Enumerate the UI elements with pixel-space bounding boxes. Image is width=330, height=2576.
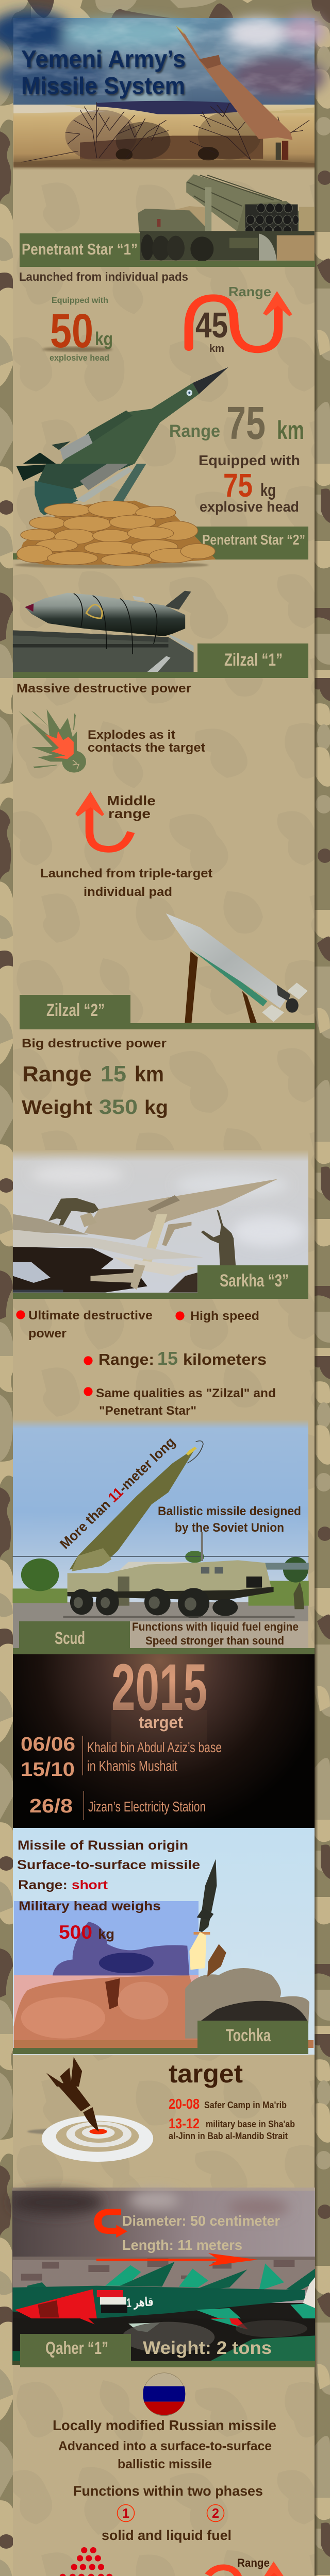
text: target list: Safer Camp in Ma'rib — [204, 2100, 287, 2110]
stat: 75 kg explosive head — [199, 452, 300, 515]
hero clouds — [0, 10, 325, 104]
text: locally modified Russian missile: Locally modified Russian missile — [53, 2417, 276, 2433]
text: diameter and length — [122, 2213, 280, 2253]
list: Sarkha qualities: "Penetrant Star" — [99, 1404, 196, 1418]
icon: phase number 1 — [118, 2505, 134, 2521]
stat: 50 kg explosive head: kg — [95, 328, 113, 349]
list: Sarkha qualities: Ultimate destructive — [28, 1309, 153, 1323]
panel: Penetrant Star 1 rocket launcher image — [138, 174, 315, 261]
icon: missile hitting target — [27, 2057, 153, 2162]
stat: 75 kg explosive head: kg — [260, 481, 276, 500]
text: ballistic missile designed by Soviet Union: by the Soviet Union — [175, 1521, 284, 1535]
text: launched from triple-target pad — [40, 867, 212, 899]
stat: range 45 km with arrow: Range — [228, 284, 271, 299]
stat: weight 350 kg: Weight — [22, 1097, 92, 1118]
text: ballistic missile designed by Soviet Union — [158, 1504, 301, 1535]
list: Sarkha qualities: High speed — [190, 1309, 259, 1323]
label: Tochka — [13, 2021, 308, 2054]
hero dark storm cloud — [13, 101, 315, 114]
target date: Jizan station: Jizan’s Electricity Station — [88, 1799, 206, 1815]
label: Scud: Scud — [55, 1629, 85, 1648]
text: Tochka description: Surface-to-surface missile — [17, 1858, 200, 1872]
label: Penetrant Star 1: Penetrant Star “1” — [22, 240, 138, 258]
list: Sarkha qualities: power — [28, 1327, 67, 1341]
text: locally modified Russian missile: ballistic missile — [118, 2457, 212, 2471]
text: target list: 13-12 — [169, 2115, 200, 2131]
text: weight 2 tons: Weight: 2 tons — [143, 2338, 272, 2358]
target dates: Khalid bin Abdul Aziz base — [21, 1734, 222, 1781]
icon: red arrow — [208, 2562, 286, 2576]
label: Penetrant Star 1 — [20, 233, 315, 267]
panel: 2015 targets — [13, 1651, 315, 1828]
image: Tochka launch — [13, 1828, 315, 2055]
title: Yemeni Army’s — [21, 45, 186, 72]
image: Qaher 1 missile — [10, 2188, 315, 2361]
text: explodes on contact: Explodes as it — [88, 728, 175, 742]
label: Zilzal 1: Zilzal “1” — [224, 650, 283, 670]
image: Zilzal 1 missile on launcher — [13, 591, 194, 672]
text: explodes on contact — [88, 728, 205, 755]
text: diameter and length: Length: 11 meters — [122, 2237, 242, 2253]
text: Tochka description: Range: — [18, 1878, 68, 1892]
text: Tochka description: Military head weighs — [19, 1899, 161, 1913]
target dates: Khalid bin Abdul Aziz base: 06/06 — [21, 1734, 75, 1755]
stat: range 75 km: Range — [169, 421, 220, 441]
label: Zilzal 2: Zilzal “2” — [46, 1001, 105, 1020]
hero truck and trees — [13, 102, 315, 167]
stat: weight 350 kg: kg — [144, 1097, 168, 1118]
stat: range 75 km — [169, 398, 304, 449]
label: Penetrant Star 2 — [13, 527, 308, 560]
target dates: Khalid bin Abdul Aziz base: 15/10 — [21, 1759, 75, 1781]
stat: 50 kg explosive head: 50 — [50, 304, 93, 358]
stat: range 45 km with arrow: 45 — [195, 305, 228, 345]
list: Sarkha qualities — [16, 1309, 276, 1418]
text: Tochka description: short — [72, 1878, 108, 1892]
text: explodes on contact: contacts the target — [88, 741, 205, 755]
callout: rotated length text: More than 11-meter long — [57, 1434, 178, 1552]
label: Qaher 1: Qaher “1” — [45, 2338, 108, 2358]
target date: Jizan station — [29, 1791, 206, 1820]
stat: 50 kg explosive head: explosive head — [50, 353, 109, 363]
text: ballistic missile designed by Soviet Union: Ballistic missile designed — [158, 1504, 301, 1518]
label: Scud — [13, 1621, 315, 1654]
text: middle range: Middle — [107, 793, 156, 808]
target dates: Khalid bin Abdul Aziz base: in Khamis Mushait — [87, 1758, 177, 1774]
image: sandbags — [15, 501, 216, 568]
icon: phase number 1: 1 — [122, 2505, 129, 2521]
stat: 75 kg explosive head: 75 — [223, 467, 253, 504]
text: diameter and length: Diameter: 50 centimeter — [122, 2213, 280, 2229]
title: Missile System — [21, 72, 185, 99]
list: Sarkha qualities: Range: — [98, 1350, 154, 1368]
target dates: Khalid bin Abdul Aziz base: Khalid bin Abdul Aziz’s base — [87, 1739, 222, 1755]
text: target list: 20-08 — [169, 2096, 200, 2112]
hero cloud texture — [13, 18, 315, 95]
stat: range 300 km with arrow: Range — [237, 2556, 270, 2569]
stat: range 15 km — [22, 1061, 164, 1087]
hero ground — [13, 105, 315, 170]
Arabic name on missile: قاهر 1 — [126, 2295, 154, 2310]
text: target list — [169, 2096, 295, 2141]
icon: phase number 2 — [207, 2505, 224, 2521]
list: Sarkha qualities: kilometers — [183, 1350, 267, 1368]
image: Zilzal 2 missile on stand — [166, 913, 308, 1023]
target date: Jizan station: 26/8 — [29, 1795, 73, 1817]
Russian flag overlay bands — [14, 1901, 199, 2048]
icon: phase number 2: 2 — [212, 2505, 219, 2521]
text: locally modified Russian missile — [53, 2417, 276, 2471]
stat: range 45 km with arrow: km — [209, 343, 224, 354]
target heading: target — [139, 1713, 183, 1732]
text: Scud engine and speed — [130, 1620, 308, 1648]
label: Sarkha 3 — [13, 1265, 308, 1299]
stat: 50 kg explosive head — [42, 296, 113, 363]
stat: 75 kg explosive head: explosive head — [200, 499, 299, 515]
arrows: diameter and length — [96, 2212, 258, 2266]
label: Tochka: Tochka — [226, 2026, 271, 2045]
text: target list: al-Jinn in Bab al-Mandib Strait — [169, 2131, 288, 2141]
text: middle range: range — [108, 806, 151, 821]
label: Zilzal 1 — [13, 643, 308, 678]
stat: weight 350 kg: 350 — [99, 1096, 138, 1118]
stat: range 75 km: km — [277, 416, 304, 445]
list: Sarkha qualities: 15 — [157, 1348, 178, 1369]
heading: massive destructive power: Massive destructive power — [16, 682, 191, 696]
icon: red winding arrow — [189, 291, 292, 349]
stat: range 300 km with arrow — [168, 2556, 286, 2576]
text: middle range — [107, 793, 156, 821]
text: launched from triple-target pad: Launched from triple-target — [40, 867, 212, 880]
text: functions within two phases: Functions within two phases — [73, 2483, 263, 2499]
text: big destructive power: Big destructive power — [22, 1037, 167, 1050]
image: Scud launcher truck — [12, 1419, 309, 1649]
text: Scud engine and speed: Speed stronger than sound — [145, 1634, 284, 1647]
text: Scud engine and speed: Functions with liquid fuel engine — [132, 1620, 299, 1633]
stat: range 45 km with arrow — [189, 284, 292, 354]
icon: middle range arrow — [75, 791, 131, 849]
hero sky — [13, 18, 315, 108]
year 2015 — [111, 1651, 207, 1743]
label: Penetrant Star 2: Penetrant Star “2” — [202, 532, 305, 548]
stat: range 75 km: 75 — [226, 398, 266, 449]
text: Tochka description: Missile of Russian origin — [18, 1838, 188, 1853]
title — [21, 45, 186, 99]
heading: target: target — [169, 2059, 243, 2088]
stat: range 15 km: km — [135, 1062, 164, 1086]
text: locally modified Russian missile: Advanced into a surface-to-surface — [58, 2439, 272, 2453]
label: Sarkha 3: Sarkha “3” — [220, 1271, 289, 1291]
text: target list: military base in Sha'ab — [206, 2119, 295, 2129]
text: Tochka description: 500 — [59, 1922, 92, 1943]
stat: 75 kg explosive head: Equipped with — [199, 452, 300, 468]
stat: range 15 km: Range — [22, 1062, 92, 1086]
icon: Russian flag circle — [143, 2372, 185, 2416]
label: Qaher 1 — [12, 2334, 315, 2367]
text: launched from triple-target pad: individual pad — [84, 885, 172, 899]
stat: 50 kg explosive head: Equipped with — [52, 296, 108, 305]
image: Sarkha 3 missiles and soldiers — [13, 1150, 308, 1293]
image: Penetrant Star 2 missile on launcher — [16, 367, 228, 515]
text: solid and liquid fuel: solid and liquid fuel — [102, 2528, 232, 2543]
panel: hero photo with title — [0, 10, 325, 170]
text: Tochka description — [17, 1838, 200, 1943]
icon: explosion — [19, 709, 86, 773]
hero ballistic missile — [176, 26, 292, 160]
icon: splinter dot pyramid — [51, 2547, 122, 2576]
year 2015: 2015 — [111, 1651, 207, 1724]
list: Sarkha qualities: Same qualities as "Zilzal" and — [96, 1386, 276, 1400]
stat: weight 350 kg — [22, 1096, 168, 1118]
heading: launched from individual pads: Launched from individual pads — [19, 270, 188, 283]
stat: range 15 km: 15 — [101, 1061, 126, 1087]
text: Tochka description: kg — [98, 1926, 114, 1942]
label: Zilzal 2 — [20, 995, 315, 1029]
